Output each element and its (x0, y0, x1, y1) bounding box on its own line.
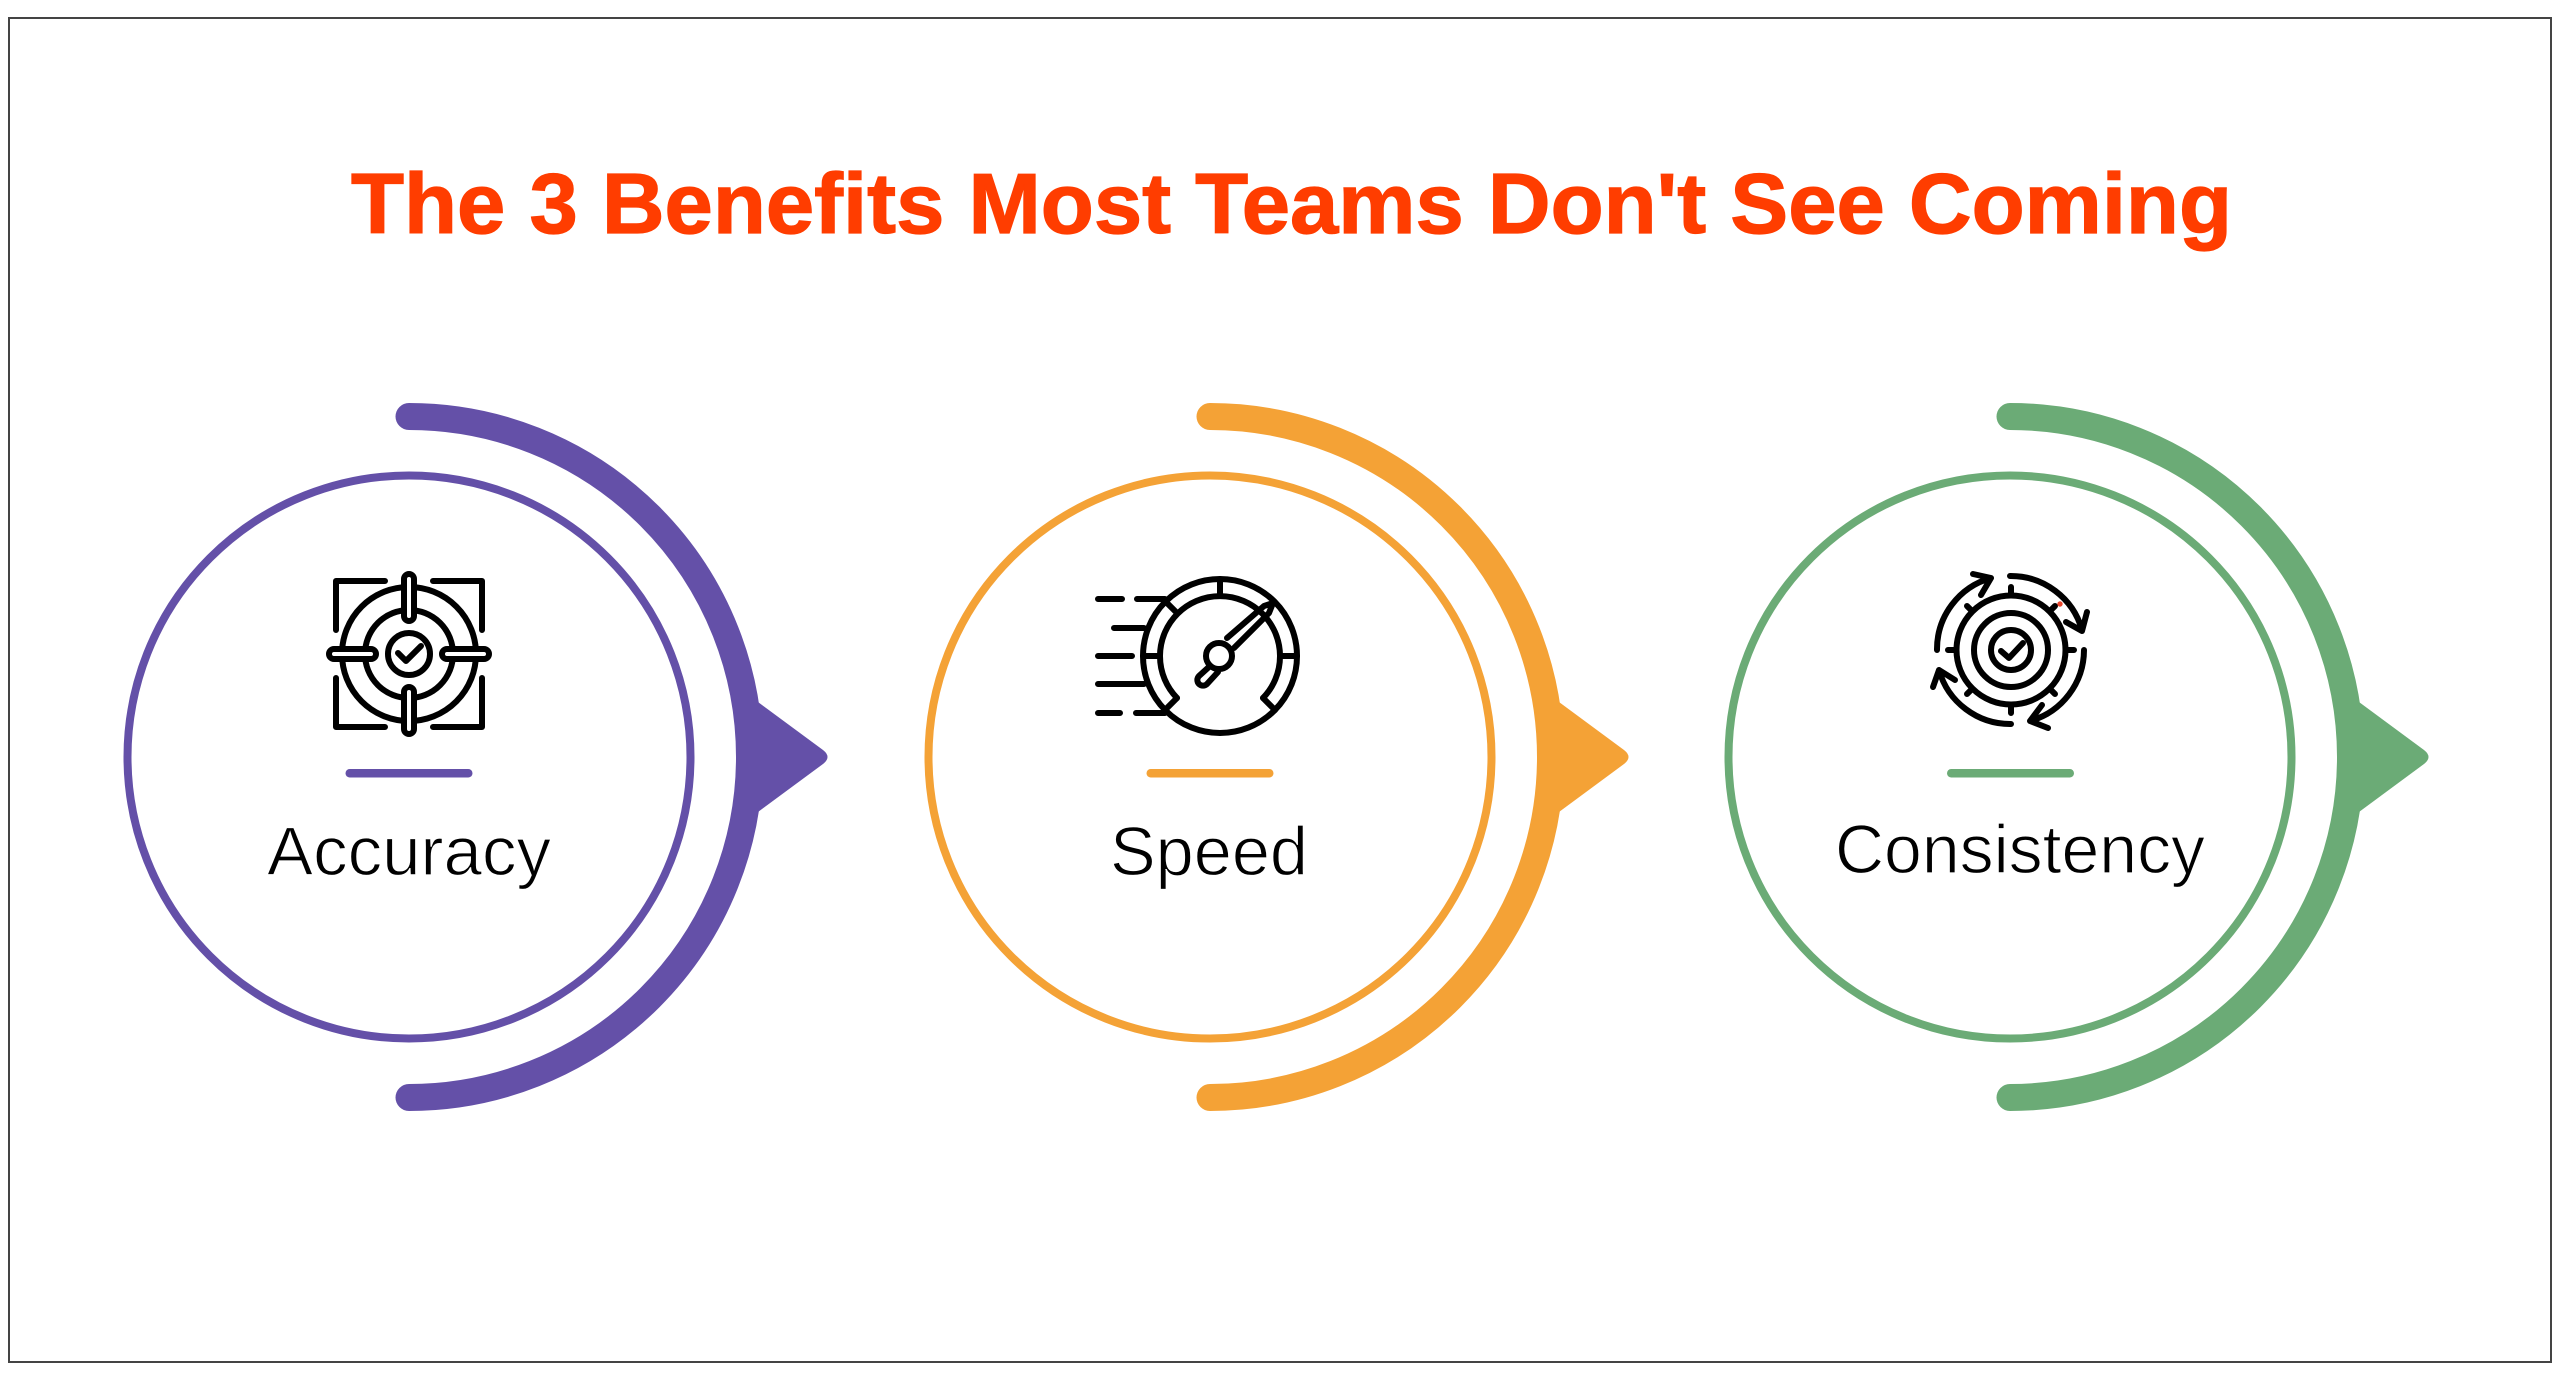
icon: cycle with check (1933, 574, 2087, 728)
icon: target with check (329, 574, 489, 734)
underline (1146, 769, 1274, 778)
outer arc with arrow (409, 416, 828, 1098)
underline (1947, 769, 2074, 778)
inner circle (928, 476, 1492, 1038)
panel: speed (928, 416, 1628, 1098)
panel: consistency (1728, 416, 2428, 1098)
label: Speed (1110, 813, 1308, 890)
title: The 3 Benefits Most Teams Don't See Coming (351, 157, 2232, 252)
outer arc with arrow (2010, 416, 2428, 1098)
inner circle (128, 476, 690, 1038)
underline (346, 769, 472, 778)
outer arc with arrow (1210, 416, 1628, 1098)
label: Consistency (1835, 811, 2205, 888)
panel: accuracy (128, 416, 828, 1098)
inner circle (1728, 476, 2292, 1038)
label: Accuracy (267, 813, 551, 890)
icon: speedometer (1098, 579, 1297, 733)
